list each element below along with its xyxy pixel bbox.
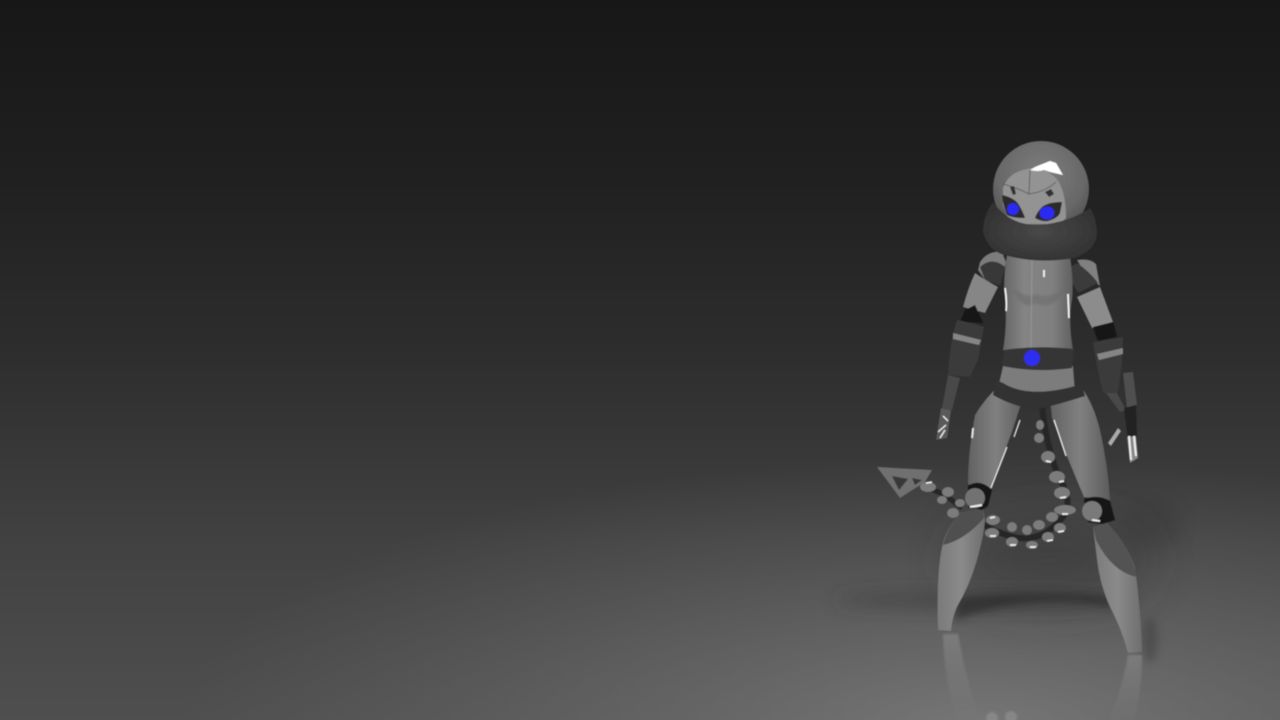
right knee joint [1082,497,1115,524]
lower belt [993,380,1085,410]
floor reflection of legs [943,634,1142,720]
leg highlights [972,420,1066,488]
left shin [938,508,985,631]
left arm [936,252,1006,440]
chest shading and highlights [1005,258,1069,350]
upper belt [1002,347,1074,370]
left knee joint [965,483,992,510]
hips [998,366,1075,402]
floor shadow [835,500,1180,662]
robot figure [877,141,1142,653]
blue belt gem [1024,350,1040,366]
tail arrowhead [877,467,932,498]
blue eyes [1007,203,1054,220]
torso [1003,255,1073,350]
left thigh [968,385,1024,490]
visor opening and face [1002,168,1066,224]
tail highlights [926,461,1068,547]
tail segments [920,420,1076,549]
right thigh [1050,388,1110,500]
tail chain [922,405,1068,538]
right arm [1065,260,1138,463]
helmet [993,141,1089,237]
floor light pool [0,400,1280,720]
neck scarf [983,202,1097,261]
helmet specular highlight [1030,161,1063,175]
right shin [1093,523,1142,653]
